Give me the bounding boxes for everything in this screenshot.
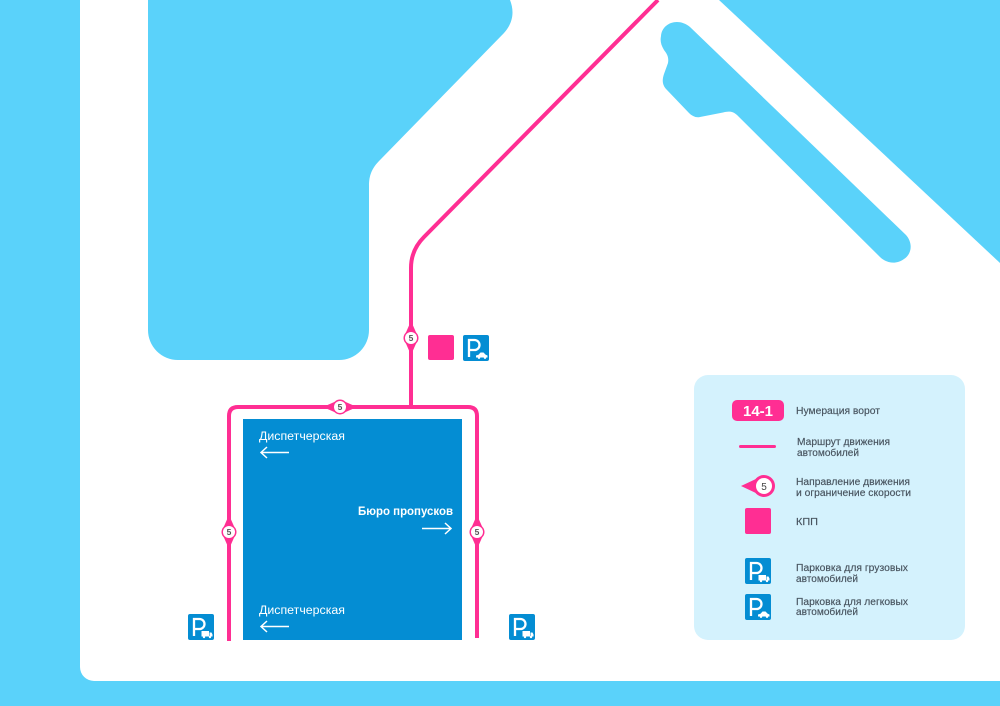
- label: pass office: Бюро пропусков: [358, 506, 453, 518]
- speed marker: right road: [470, 515, 484, 549]
- legend text: gate numbering: Нумерация ворот: [796, 406, 880, 417]
- legend text: speed limit: и ограничение скорости: [796, 488, 911, 499]
- legend: car parking icon: [745, 594, 771, 620]
- legend: direction and speed marker: [741, 475, 775, 497]
- legend: truck parking icon: [745, 558, 771, 584]
- label: dispatcher bottom: Диспетчерская: [259, 605, 345, 617]
- water area: narrow bay: [661, 22, 911, 263]
- speed marker: left road: 5: [227, 527, 232, 537]
- legend text: car parking: Парковка для легковых: [796, 597, 908, 608]
- arrow: dispatcher bottom: [261, 621, 289, 632]
- legend: route line: [739, 445, 776, 448]
- speed marker: right road: 5: [475, 527, 480, 537]
- legend: gate numbering badge: [732, 400, 784, 421]
- label: dispatcher top: Диспетчерская: [259, 431, 345, 443]
- legend: checkpoint square: [745, 508, 771, 534]
- icon: truck parking left: [188, 614, 214, 640]
- route: vehicle path: [229, 0, 658, 641]
- speed marker: entrance road: 5: [409, 333, 414, 343]
- legend: direction and speed marker: 5: [761, 482, 767, 493]
- icon: car parking at checkpoint: [463, 335, 489, 361]
- icon: truck parking right: [509, 614, 535, 640]
- speed marker: entrance road: [404, 321, 418, 355]
- legend text: checkpoint: КПП: [796, 517, 818, 528]
- speed marker: left road: [222, 515, 236, 549]
- legend: gate numbering badge: 14-1: [743, 403, 773, 420]
- checkpoint square: [428, 335, 454, 360]
- water area: left basin: [148, 0, 512, 360]
- speed marker: top road: [323, 400, 357, 414]
- legend text: route: Маршрут движения: [797, 437, 890, 448]
- arrow: pass office: [422, 523, 451, 534]
- legend text: route second line: автомобилей: [797, 447, 859, 459]
- legend text: direction: Направление движения: [796, 477, 910, 488]
- panel: legend: [694, 375, 965, 640]
- speed marker: top road: 5: [338, 402, 343, 412]
- arrow: dispatcher top: [261, 447, 289, 458]
- legend text: truck parking: Парковка для грузовых: [796, 563, 908, 574]
- building: [243, 419, 462, 640]
- legend text: truck parking second line: автомобилей: [796, 573, 858, 585]
- legend text: car parking second line: автомобилей: [796, 606, 858, 618]
- water area: top right: [719, 0, 1000, 263]
